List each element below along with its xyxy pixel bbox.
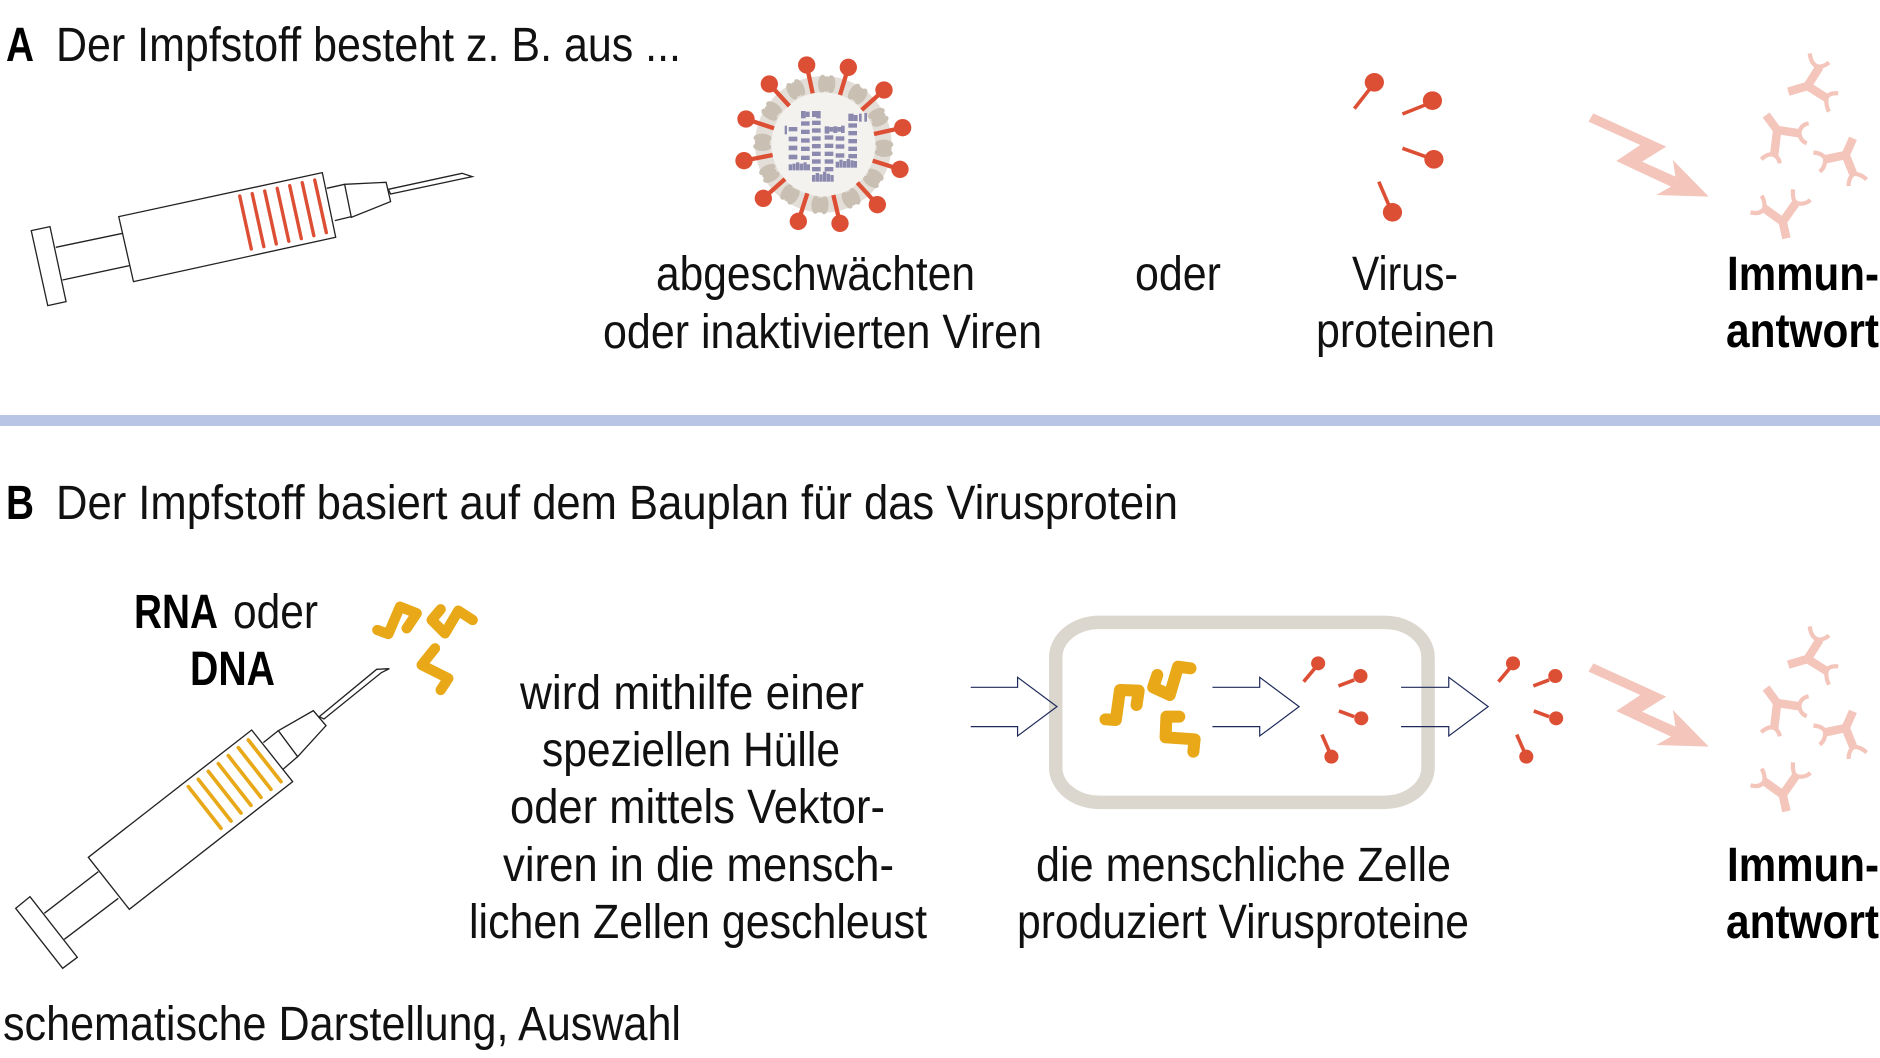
label: cell produces proteins xyxy=(1017,839,1469,949)
icon: virus proteins xyxy=(1354,73,1444,222)
icon: proteins outside cell xyxy=(1499,656,1563,764)
text: delivery description: viren in die mensch- xyxy=(503,839,894,892)
icon: proteins inside cell xyxy=(1304,656,1368,764)
arrow: lightning bolt B xyxy=(1589,663,1709,747)
label: immune response B xyxy=(1726,839,1879,949)
label: immune response A xyxy=(1726,248,1879,358)
label: cell produces proteins: die menschliche Zelle xyxy=(1036,839,1451,892)
section A heading: A xyxy=(6,19,34,72)
label: virus proteins: proteinen xyxy=(1316,305,1495,358)
arrow: RNA to protein xyxy=(1212,677,1299,736)
label: RNA or DNA: DNA xyxy=(190,643,275,696)
label: RNA or DNA: RNA xyxy=(134,586,218,639)
icon: RNA strands xyxy=(377,607,473,690)
section B heading: B xyxy=(6,477,34,530)
text: delivery description: speziellen Hülle xyxy=(542,724,840,777)
icon: RNA strands in cell xyxy=(1105,667,1195,752)
icon: antibodies A xyxy=(1751,53,1867,238)
icon: virus particle xyxy=(735,56,911,232)
icon: antibodies B xyxy=(1751,626,1867,811)
arrow: out of cell xyxy=(1401,677,1488,736)
label: attenuated viruses: oder inaktivierten Viren xyxy=(603,306,1042,359)
icon: syringe with red vaccine xyxy=(31,173,472,306)
label: virus proteins: Virus- xyxy=(1352,248,1458,301)
icon: syringe with gold vaccine xyxy=(16,669,389,968)
text: delivery description: wird mithilfe einer xyxy=(519,667,864,720)
label: attenuated viruses: abgeschwächten xyxy=(656,248,975,301)
label: RNA or DNA: oder xyxy=(233,586,318,639)
label: attenuated viruses xyxy=(603,248,1042,359)
label: cell produces proteins: produziert Virusproteine xyxy=(1017,896,1469,949)
section B heading: Der Impfstoff basiert auf dem Bauplan für das Virusprotein xyxy=(56,477,1178,530)
text: delivery description: lichen Zellen geschleust xyxy=(469,896,927,949)
text: delivery description xyxy=(469,667,927,949)
label: virus proteins xyxy=(1316,248,1495,358)
arrow: into cell xyxy=(971,677,1057,736)
label: oder: oder xyxy=(1135,248,1221,301)
label: RNA or DNA xyxy=(134,586,318,696)
arrow: lightning bolt A xyxy=(1589,113,1709,197)
footnote: schematische Darstellung, Auswahl xyxy=(3,998,681,1051)
section A heading: Der Impfstoff besteht z. B. aus ... xyxy=(56,19,681,72)
text: delivery description: oder mittels Vektor- xyxy=(510,781,885,834)
panel: human cell xyxy=(1056,622,1428,802)
